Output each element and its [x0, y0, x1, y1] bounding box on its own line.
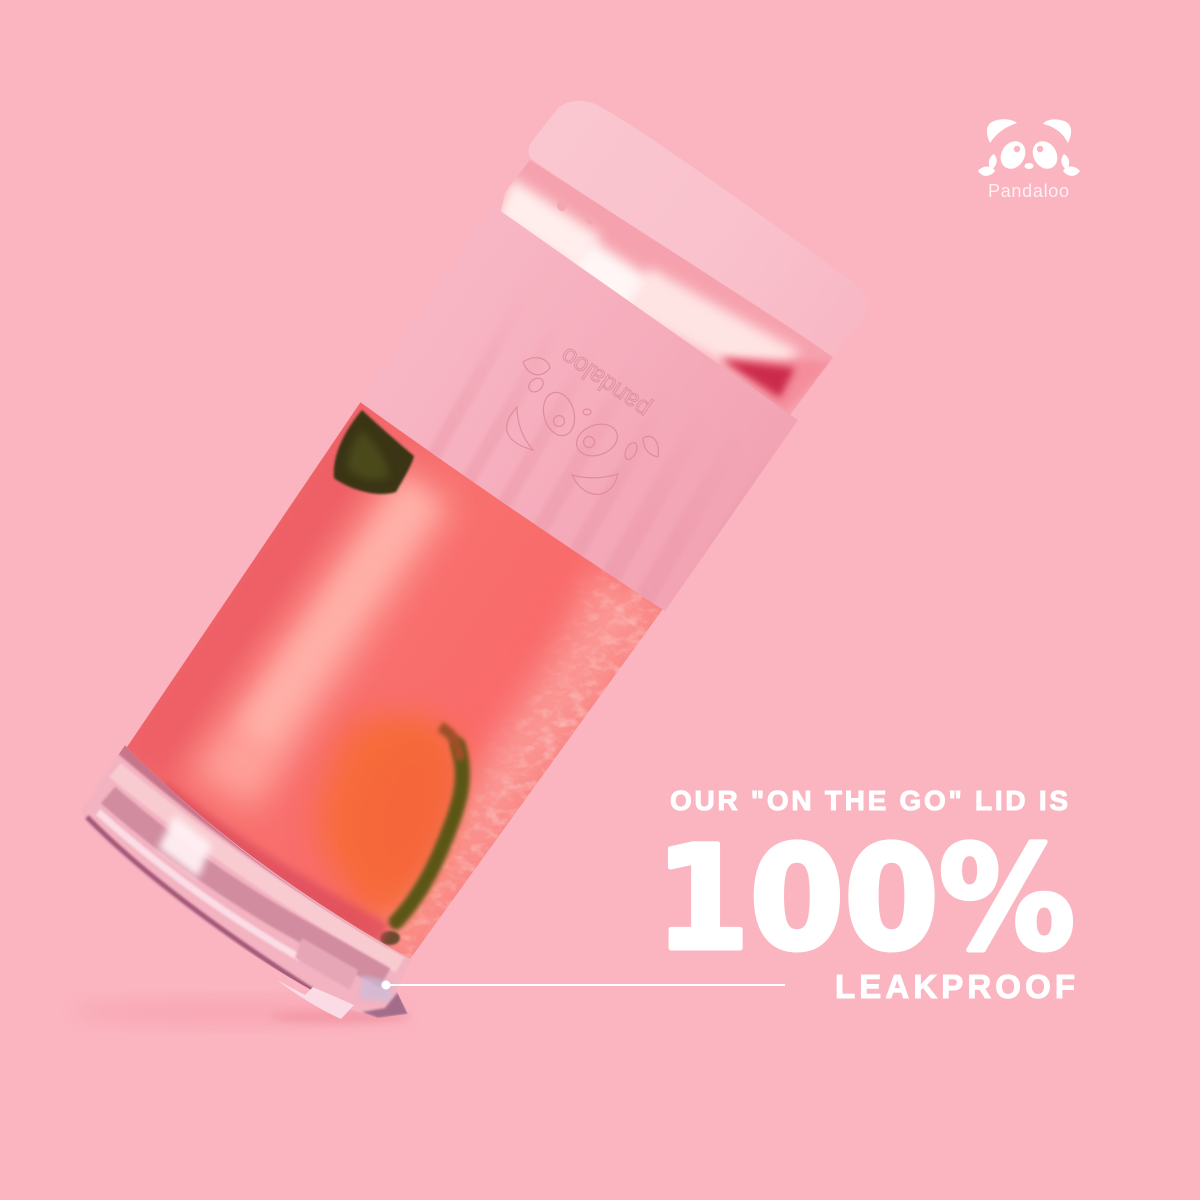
- upper glass: [501, 160, 833, 414]
- headline: OUR "ON THE GO" LID IS: [670, 785, 1068, 816]
- panda face icon: [978, 119, 1080, 176]
- embossed wordmark: pandaloo: [555, 342, 656, 424]
- frosted right edge: [368, 565, 660, 966]
- sleeve: [360, 212, 798, 611]
- red sediment along the bottom: [160, 790, 385, 935]
- main highlight band: [190, 465, 455, 810]
- callout text: [655, 785, 1075, 1005]
- embossed panda face: [507, 358, 658, 494]
- frost texture: [400, 570, 658, 959]
- base lid: [83, 745, 412, 1019]
- upper lime piece: [334, 410, 414, 494]
- lid: [529, 101, 868, 358]
- left dark edge: [152, 478, 346, 761]
- embossed logo: [507, 342, 658, 494]
- subline: LEAKPROOF: [835, 968, 1075, 1005]
- callout leader line: [382, 980, 785, 990]
- logo: Pandaloo: [978, 119, 1080, 201]
- big number: 100%: [655, 815, 1075, 982]
- wordmark: Pandaloo: [988, 181, 1069, 201]
- glass lower body with liquid: [127, 402, 662, 959]
- ground shadow: [70, 1001, 410, 1023]
- bottle: [83, 101, 868, 1019]
- base tab: [277, 980, 354, 1019]
- lime slice flesh: [318, 714, 459, 928]
- lime slice rind: [396, 745, 462, 922]
